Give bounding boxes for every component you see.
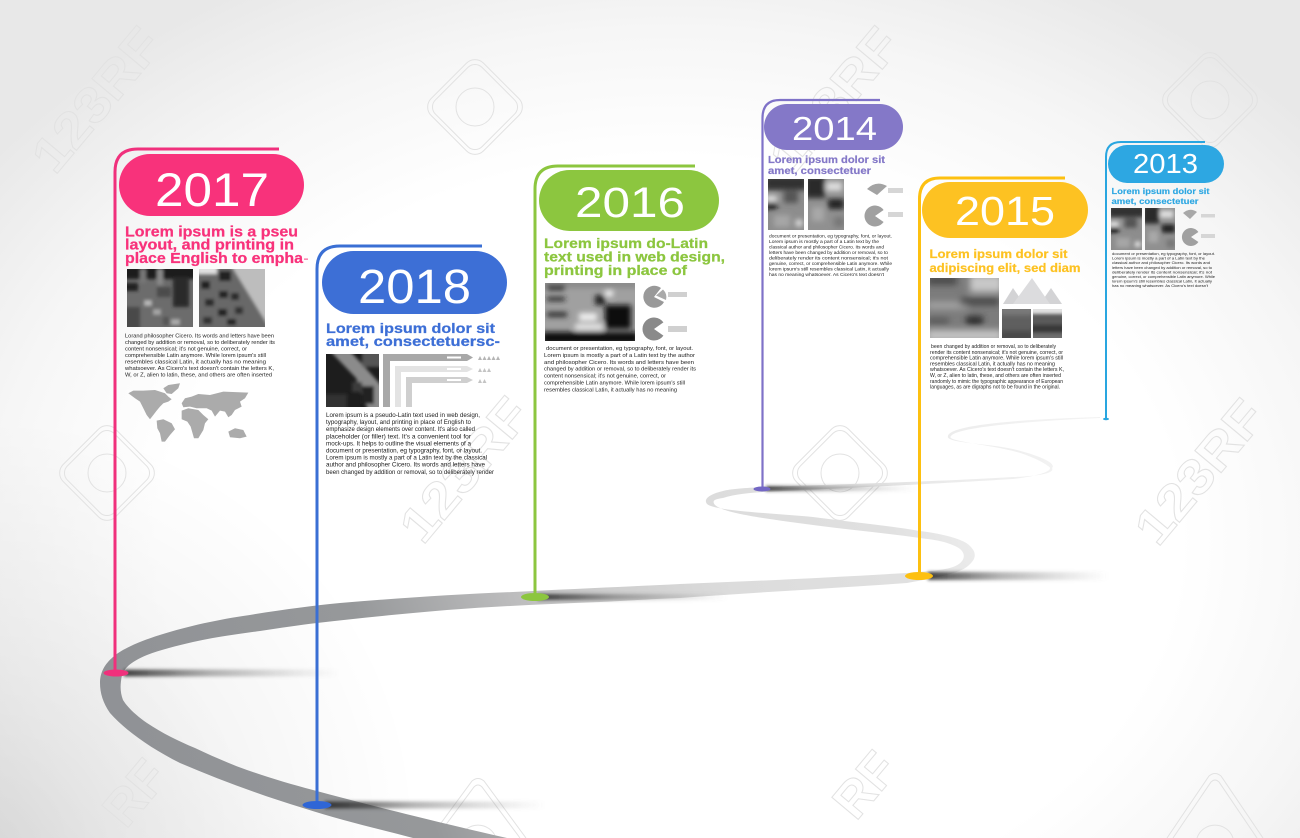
photo 2014 b [808, 179, 844, 230]
body text 2016: document or presentation, eg typography, font, or layout. [546, 346, 693, 352]
year 2014: 2014 [792, 110, 877, 147]
body text 2015: render its content nonsensical; it's not genuine, correct, or [930, 350, 1063, 356]
body text 2017: comprehensible Latin anymore. While lorem ipsum's still [125, 353, 266, 359]
body text 2013: Lorem ipsum is mostly a part of a Latin text by the [1112, 256, 1205, 261]
body text 2014: lorem ipsum's still resembles classical Latin, it actually [769, 266, 890, 272]
flag 2017 [104, 149, 308, 676]
year pill 2018 [322, 251, 507, 314]
heading 2017: layout, and printing in [125, 238, 294, 254]
marker 2017 [104, 670, 128, 676]
body text 2013: genuine, correct, or comprehensible Latin anymore. While [1112, 274, 1215, 279]
body text 2015: W, or Z, alien to latin, these, and others are often inserted [930, 373, 1061, 379]
body text 2013: classical author and philosopher Cicero. Its words and [1112, 260, 1210, 265]
bottom-left corner shading [0, 418, 420, 838]
heading 2016: text used in web design, [544, 250, 725, 264]
heading 2018: amet, consectetuersc- [326, 334, 500, 350]
body text 2017: changed by addition or removal, so to deliberately render its [125, 340, 275, 346]
heading 2013: amet, consectetuer [1112, 196, 1199, 206]
body text 2018 [326, 412, 494, 476]
photo 2018 [326, 354, 379, 407]
marker 2018 [302, 801, 332, 809]
body text 2018: emphasize design elements over content. It's also called [326, 426, 476, 433]
pole 2018 [317, 246, 482, 805]
body text 2014: genuine, correct, or comprehensible Latin anymore. While [769, 261, 892, 266]
body text 2018: been changed by addition or removal, so to deliberately render [326, 469, 494, 476]
heading 2018: Lorem ipsum dolor sit [326, 321, 495, 337]
marker shadows [124, 486, 1108, 808]
body text 2015: whatsoever. As Cicero's text doesn't contain the letters K, [930, 367, 1064, 373]
pole 2016 [535, 166, 695, 597]
year 2017: 2017 [155, 163, 269, 216]
heading 2018 [326, 321, 500, 350]
heading 2014: amet, consectetuer [768, 166, 871, 177]
arrow infographic 2018 [383, 354, 500, 407]
body text 2015 [930, 344, 1064, 391]
heading 2016: printing in place of [544, 263, 687, 278]
body text 2014: classical author and philosopher Cicero. Its words and [769, 244, 884, 250]
body text 2016 [544, 346, 696, 393]
winding road [100, 417, 1100, 838]
body text 2014 [769, 234, 892, 277]
body text 2015: languages, as are digraphs not to be found in the original. [930, 385, 1060, 391]
heading 2017: -- [304, 257, 308, 263]
body text 2013: deliberately render its content nonsensical; it's not [1112, 269, 1213, 274]
flag 2018 [302, 246, 507, 809]
photo 2015 a [930, 278, 999, 338]
watermarks: RF [822, 741, 908, 829]
marker 2016 [521, 593, 549, 601]
year pill 2014 [764, 104, 903, 150]
pie charts 2013 [1182, 210, 1215, 246]
marker 2013 [1103, 418, 1109, 420]
pole 2017 [115, 149, 279, 673]
body text 2013: has no meaning whatsoever. As Cicero's text doesn't [1112, 283, 1209, 288]
flag 2014 [754, 100, 903, 492]
body text 2018: placeholder (or filler) text. It's a convenient tool for [326, 433, 471, 440]
pole 2013 [1106, 142, 1205, 419]
year pill 2016 [539, 170, 719, 231]
body text 2018: document or presentation, eg typography, font, or layout. [326, 448, 482, 454]
body text 2017 [124, 334, 275, 378]
marker 2015 [905, 572, 933, 580]
photo 2013 a [1111, 208, 1142, 250]
year 2015: 2015 [955, 188, 1055, 234]
body text 2015: randomly to mimic the typographic appearance of European [930, 379, 1063, 385]
heading 2013: Lorem ipsum dolor sit [1112, 186, 1210, 196]
year pill 2017 [119, 154, 304, 216]
watermarks: 123RF [759, 17, 911, 183]
flag 2015 [905, 178, 1088, 580]
heading 2017 [125, 224, 308, 267]
body text 2016: comprehensible Latin anymore. While lorem ipsum's still [544, 380, 685, 386]
watermarks: 123RF [21, 17, 173, 183]
body text 2013: document or presentation, eg typography, font, or layout. [1112, 251, 1215, 256]
year 2018: 2018 [358, 261, 471, 314]
heading 2015 [930, 247, 1080, 275]
flag 2013 [1103, 142, 1224, 420]
flag 2016 [521, 166, 725, 601]
photo 2015 c [1033, 309, 1062, 338]
body text 2018: Lorem ipsum is a pseudo-Latin text used in web design, [326, 412, 480, 419]
body text 2016: resembles classical Latin, it actually has no meaning [544, 387, 677, 393]
body text 2017: W, or Z, alien to latin, these, and others are often inserted [125, 372, 272, 378]
body text 2014: deliberately render its content nonsensical; it's not [769, 256, 889, 260]
body text 2017: Lorand philosopher Cicero. Its words and letters have been [125, 334, 274, 340]
heading 2017: Lorem ipsum is a pseu [125, 224, 298, 240]
year pill 2013 [1108, 145, 1224, 183]
heading 2015: Lorem ipsum dolor sit [930, 247, 1068, 261]
pie charts 2014 [864, 184, 903, 226]
year pill 2015 [922, 182, 1088, 238]
photo 2013 b [1145, 208, 1175, 250]
body text 2018: author and philosopher Cicero. Its words and letters have [326, 462, 486, 469]
marker 2014 [754, 486, 770, 492]
watermarks: 123RF [389, 387, 541, 553]
body text 2016: Lorem ipsum is mostly a part of a Latin text by the author [544, 353, 695, 359]
body text 2014: document or presentation, eg typography, font, or layout. [769, 234, 892, 238]
photo 2017 b [199, 269, 265, 327]
body text 2018: mock-ups. It helps to outline the visual elements of a [326, 440, 472, 447]
heading 2016: Lorem ipsum do-Latin [544, 236, 708, 251]
body text 2016: and philosopher Cicero. Its words and letters have been [544, 360, 694, 366]
heading 2017: place English to empha [125, 251, 304, 267]
pie charts 2016 [642, 286, 687, 340]
body text 2013 [1112, 251, 1215, 288]
photo 2016 [545, 283, 635, 341]
mountain icon 2015 [1003, 278, 1062, 304]
body text 2014: Lorem ipsum is mostly a part of a Latin text by the [769, 239, 879, 244]
photo 2014 a [768, 179, 804, 230]
body text 2016: content nonsensical; it's not genuine, correct, or [544, 374, 666, 380]
body text 2013: letters have been changed by addition or removal, so to [1112, 265, 1212, 270]
body text 2018: typography, layout, and printing in place of English to [326, 419, 472, 426]
body text 2018: Lorem ipsum is mostly a part of a Latin text by the classical [326, 455, 487, 462]
watermarks: 123RF [1124, 389, 1276, 555]
heading 2013 [1112, 186, 1210, 206]
body text 2013: lorem ipsum's still resembles classical Latin, it actually [1112, 279, 1212, 284]
photo 2015 b [1002, 309, 1031, 338]
heading 2016 [544, 236, 725, 278]
year 2016: 2016 [575, 179, 685, 227]
body text 2015: comprehensible Latin anymore. While lorem ipsum's still [930, 356, 1063, 362]
heading 2014: Lorem ipsum dolor sit [768, 155, 886, 166]
body text 2017: resembles classical Latin, it actually has no meaning [125, 360, 266, 366]
watermarks: RF [92, 749, 178, 837]
heading 2015: adipiscing elit, sed diam [930, 261, 1080, 275]
photo 2017 a [127, 269, 193, 327]
world map [128, 383, 248, 442]
year 2013: 2013 [1133, 148, 1198, 179]
body text 2016: changed by addition or removal, so to deliberately render its [544, 367, 696, 373]
pole 2014 [762, 100, 880, 489]
body text 2015: been changed by addition or removal, so to deliberately [931, 344, 1056, 350]
heading 2014 [768, 155, 886, 177]
body text 2017: whatsoever. As Cicero's text doesn't contain the letters K, [124, 366, 274, 372]
body text 2014: letters have been changed by addition or removal, so to [769, 250, 888, 255]
pole 2015 [920, 178, 1065, 576]
body text 2017: content nonsensical; it's not genuine, correct, or [125, 346, 247, 352]
body text 2015: resembles classical Latin, it actually has no meaning [930, 361, 1055, 367]
body text 2014: has no meaning whatsoever. As Cicero's text doesn't [769, 272, 885, 277]
